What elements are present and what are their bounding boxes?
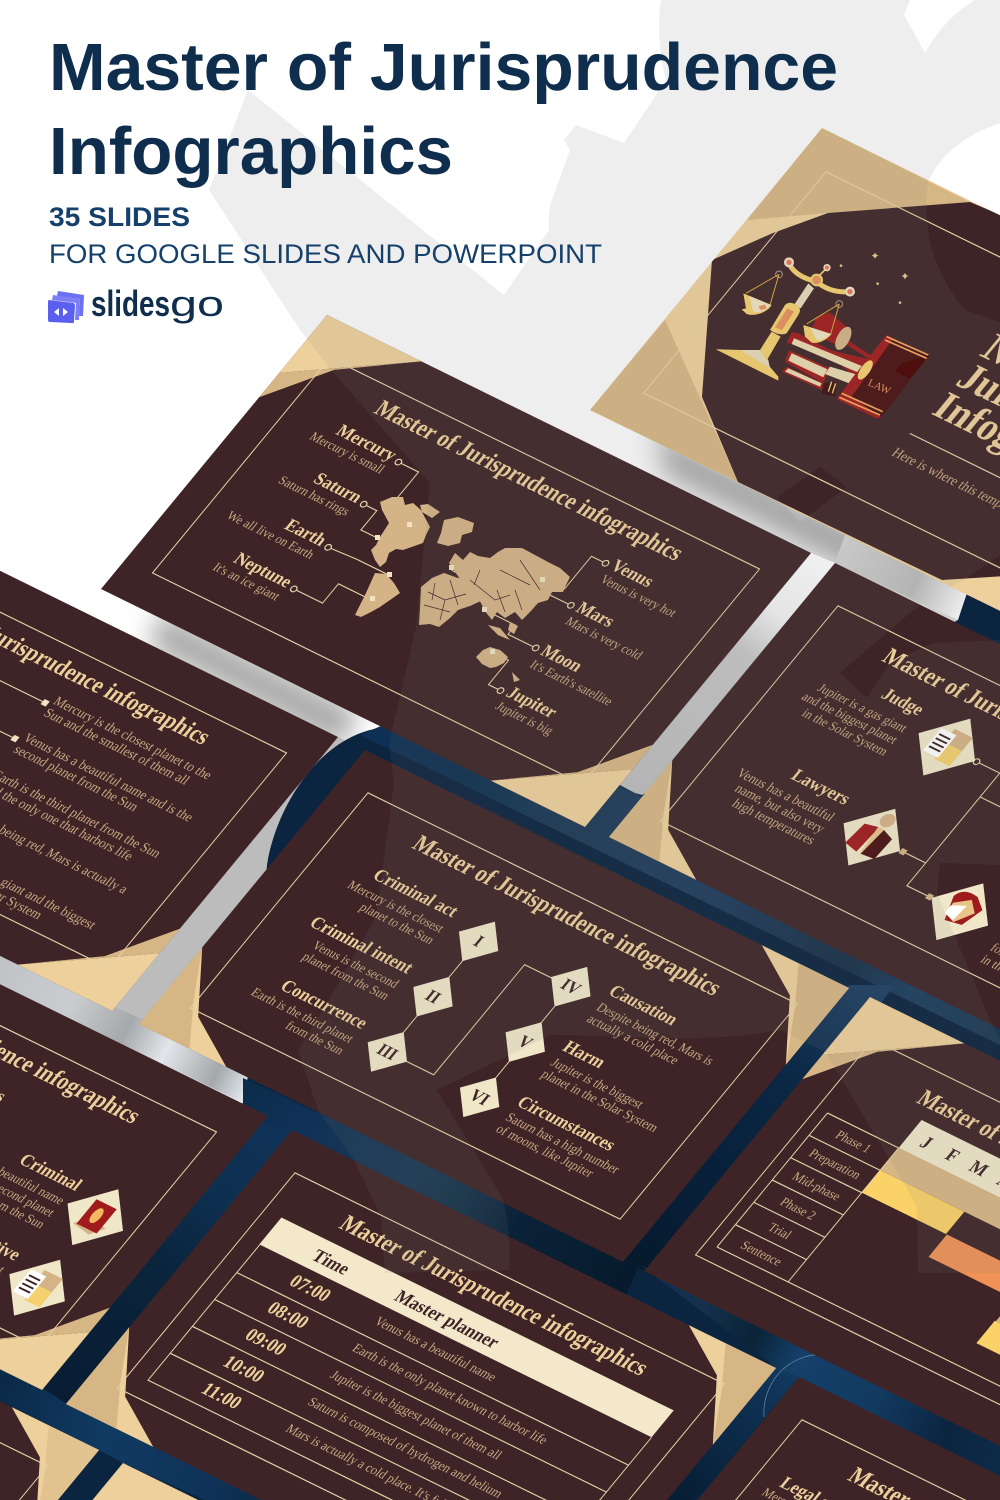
gantt header months	[899, 1120, 1000, 1309]
row 09:00	[240, 1325, 507, 1466]
centre slide title: Master of Jurisprudence infographics	[407, 831, 727, 1001]
table header band	[259, 1218, 674, 1437]
cover dark beige left wedge	[590, 320, 738, 482]
navy band under centre slide	[243, 1078, 640, 1305]
table header band: Time	[308, 1246, 355, 1279]
slide background	[0, 878, 268, 1390]
icon: slidesgo logo	[48, 291, 84, 323]
label: Mercury: Mercury	[332, 420, 402, 464]
frame	[661, 606, 1000, 1032]
beige corner left dark	[139, 947, 253, 1049]
logo wordmark: slides	[91, 283, 170, 324]
row 07:00	[285, 1271, 501, 1388]
diamond III: III	[373, 1040, 402, 1064]
beige corner top lower band	[259, 315, 421, 444]
text: Judge: in the Solar System	[799, 706, 891, 758]
light strip under left slide	[0, 945, 248, 1103]
label: Neptune: Neptune	[230, 548, 297, 591]
diamond IV	[535, 957, 607, 1016]
row 11:00	[196, 1379, 533, 1500]
beige corner left	[139, 947, 289, 1067]
navy band under gantt slide	[640, 1265, 1000, 1500]
navy band right of table slide	[655, 1367, 799, 1500]
cover beige background	[590, 128, 1000, 655]
icon: open book	[908, 869, 1000, 954]
row 10:00	[218, 1352, 508, 1500]
beige corner top	[55, 1463, 217, 1500]
drop shadows behind slides	[150, 430, 1000, 748]
frame	[696, 1040, 1000, 1466]
connectors	[293, 461, 606, 691]
label: Saturn: Saturn has rings	[275, 473, 353, 518]
text: Judge: Jupiter is a gas giant	[814, 681, 911, 735]
gantt bars	[806, 1148, 1000, 1421]
list text: Mercury: Mercury is the closest planet to the	[50, 694, 216, 782]
label: Mercury	[307, 413, 410, 481]
icon: document	[895, 705, 998, 789]
label: Venus: Venus is very hot	[597, 572, 680, 620]
navy background block	[0, 593, 1000, 1500]
right pan	[807, 304, 839, 334]
beige corner left dark	[609, 760, 723, 862]
world map	[355, 497, 570, 682]
beige corner left	[609, 760, 759, 880]
text: Criminal intent: planet from the Sun	[299, 950, 393, 1003]
icon: document diamond	[0, 1246, 88, 1329]
text: Circumstances: Circumstances	[513, 1092, 621, 1155]
icon: book diamond	[45, 1176, 146, 1259]
map markers	[370, 522, 545, 654]
frame	[0, 1255, 48, 1500]
label: Neptune: It's an ice giant	[210, 560, 283, 603]
beige corner top	[279, 315, 421, 419]
diamond VI	[444, 1068, 516, 1127]
label: Jupiter	[484, 678, 571, 738]
gantt row labels: Phase 1	[832, 1128, 874, 1156]
slide: planets text list	[0, 499, 338, 1011]
text: Criminal act	[335, 859, 464, 947]
text: Criminal	[0, 1119, 87, 1233]
frame	[118, 1173, 725, 1500]
row 08:00: Earth is the only planet known to harbor life	[349, 1340, 552, 1447]
label: Earth	[224, 492, 340, 566]
beige corner bottom band	[491, 698, 653, 827]
table header band: Master planner	[390, 1286, 504, 1352]
statue silhouette overlay on slides	[298, 128, 1000, 1273]
navy band left of table slide	[42, 1116, 292, 1404]
main title	[49, 30, 838, 189]
text: Lawyers: name, but also very	[732, 781, 829, 836]
navy band right of centre slide	[622, 985, 895, 1280]
frame	[625, 1420, 1000, 1500]
gantt row labels: Preparation	[806, 1146, 865, 1182]
beige corner top band	[802, 997, 964, 1126]
text: Circumstances: Saturn has a high number	[502, 1110, 624, 1177]
gantt row labels: Mid-phase	[789, 1169, 844, 1203]
stars	[872, 253, 879, 259]
beige corner bottom	[18, 907, 160, 1011]
text: Lawyers: Venus has a beautiful	[734, 765, 838, 824]
beige corner right	[0, 1407, 99, 1500]
gavel	[843, 340, 870, 357]
slide: legal elements diamonds	[139, 750, 849, 1262]
table grid	[148, 1245, 652, 1500]
label: Jupiter: Jupiter is big	[492, 699, 557, 738]
beige corner left	[66, 1327, 216, 1447]
text: Concurrence: Earth is the third planet	[248, 985, 357, 1046]
beige corner right dark	[0, 1425, 99, 1500]
text: Causation	[583, 981, 733, 1080]
roles slide background	[609, 563, 1000, 1075]
cover dark beige top wedge	[747, 128, 970, 220]
row 10:00: 10:00	[218, 1352, 269, 1387]
label: Neptune	[210, 543, 306, 607]
diamond V	[489, 1013, 561, 1071]
frame	[0, 542, 287, 968]
row 09:00: Jupiter is the biggest planet of them all	[327, 1367, 506, 1462]
list text: Venus: second planet from the Sun	[11, 742, 142, 814]
text: Judge	[789, 657, 929, 759]
list text: Mercury: Sun and the smallest of them all	[41, 705, 193, 788]
text: Criminal intent: Criminal intent	[306, 912, 418, 977]
diamond I: I	[469, 932, 488, 951]
connector dots	[879, 758, 1000, 901]
gantt row labels	[732, 1124, 883, 1271]
label: Mars: Mars is very cold	[562, 614, 646, 663]
law books stack	[787, 332, 872, 383]
slide: criminal and executive	[0, 878, 268, 1390]
text: Lawyers: high temperatures	[729, 796, 819, 847]
text: Harm: Jupiter is the biggest	[548, 1055, 648, 1111]
gantt slide background	[644, 997, 1000, 1500]
gantt header months: J	[916, 1132, 937, 1153]
diamond III	[351, 1023, 423, 1081]
text: Judge: and the biggest planet	[799, 690, 901, 747]
main title: Infographics	[49, 114, 453, 189]
connector lines	[0, 652, 45, 739]
row 07:00: 07:00	[285, 1271, 335, 1306]
label: Jupiter: Jupiter	[502, 682, 562, 722]
slide background	[0, 1212, 99, 1500]
label: Moon: It's Earth's satellite	[527, 658, 616, 708]
label: Mercury: Mercury is small	[307, 429, 388, 476]
slide: cover with scales and books	[590, 128, 1000, 655]
beige corner right	[626, 1325, 776, 1445]
row 09:00: 09:00	[240, 1325, 291, 1360]
frame	[191, 793, 798, 1219]
text: Criminal intent: Venus is the second	[309, 938, 402, 991]
diamond II: II	[421, 986, 445, 1007]
text: Concurrence: from the Sun	[282, 1019, 348, 1058]
text: Causation: Causation	[605, 981, 683, 1029]
connector lines	[884, 762, 1000, 899]
gantt header months: M	[965, 1157, 993, 1180]
beige corner bottom	[491, 723, 633, 827]
text: Legal system	[759, 1469, 904, 1500]
list slide background	[0, 499, 338, 1011]
diamond IV: IV	[557, 975, 586, 999]
text: Executive	[0, 1204, 25, 1278]
gantt row labels: Trial	[765, 1220, 795, 1242]
text: Criminal: Criminal	[15, 1149, 87, 1194]
centre slide background	[139, 750, 849, 1262]
frame	[0, 921, 217, 1347]
label: Saturn	[275, 456, 375, 523]
text: Circumstances: of moons, like Jupiter	[493, 1121, 598, 1180]
map slide background	[101, 315, 811, 827]
diamond V: V	[514, 1032, 537, 1053]
label: Moon: Moon	[536, 641, 587, 676]
slide: bottom corner	[0, 1463, 607, 1500]
navy band above centre slide	[360, 722, 1000, 1045]
row 08:00	[262, 1298, 553, 1451]
grey strip between map slide and judge slide	[612, 553, 835, 800]
gantt grid	[717, 1113, 1000, 1443]
table slide background	[66, 1130, 776, 1500]
beige corner top	[822, 997, 964, 1101]
beige corner bottom band	[18, 882, 180, 1011]
table slide title: Master of Jurisprudence infographics	[334, 1211, 654, 1381]
slide: lower left	[0, 1212, 99, 1500]
big law book	[837, 335, 929, 417]
beige corner right dark	[662, 1343, 776, 1445]
slide background	[573, 1377, 1000, 1500]
grey strip above judge slide	[835, 535, 967, 620]
slide: roles with icons	[609, 563, 1000, 1075]
diamond I	[443, 912, 515, 971]
grey strip left of centre slide	[112, 737, 365, 1030]
cover maroon area	[702, 202, 1000, 580]
cover underline	[910, 433, 1000, 534]
label: Moon	[518, 636, 630, 708]
frame	[153, 358, 760, 784]
text: Criminal intent	[285, 912, 418, 1003]
text: Judge: Judge	[877, 684, 929, 719]
text: Circumstances	[492, 1092, 638, 1188]
beige corner right	[699, 945, 849, 1065]
icon: lawyer	[820, 795, 923, 879]
label: Mars	[554, 593, 660, 663]
gantt header months: F	[941, 1145, 964, 1166]
gantt row labels: Sentence	[737, 1238, 785, 1269]
row 11:00: 11:00	[196, 1379, 246, 1414]
background statue silhouette	[209, 0, 1000, 1273]
label: Saturn: Saturn	[309, 468, 367, 507]
icon: scales of justice and law books	[716, 253, 929, 418]
row 07:00: Venus has a beautiful name	[371, 1313, 500, 1384]
text: Causation: Despite being red, Mars is	[593, 999, 718, 1068]
text: Harm: planet in the Solar System	[538, 1066, 663, 1135]
logo wordmark: go	[170, 283, 224, 324]
gantt row labels: Phase 2	[777, 1195, 819, 1223]
icon: scales of justice and law books: LAW	[866, 378, 893, 398]
map slide title: Master of Jurisprudence infographics	[369, 396, 689, 566]
row 08:00: 08:00	[262, 1298, 313, 1333]
text: Lawyers: Lawyers	[787, 765, 855, 808]
slide: schedule table	[66, 1130, 776, 1500]
text: Concurrence	[238, 967, 372, 1058]
label: Venus	[588, 551, 694, 620]
text: Causation: actually a cold place	[584, 1011, 683, 1067]
bullet markers	[10, 699, 50, 743]
diamond II	[397, 967, 469, 1026]
row 10:00: Saturn is composed of hydrogen and helium	[305, 1394, 507, 1500]
slide: gantt chart	[644, 997, 1000, 1500]
navy band under left lower slide	[0, 1360, 300, 1500]
connector lines	[387, 941, 571, 1097]
text: Harm: Harm	[559, 1037, 610, 1072]
label: Venus: Venus	[607, 555, 659, 591]
beige corner bottom	[0, 1286, 90, 1390]
slide: world map	[101, 315, 811, 827]
label: Earth: Earth	[281, 515, 331, 550]
beige corner left dark	[66, 1327, 180, 1429]
slide: legal system	[573, 1377, 1000, 1500]
text: Criminal act: Criminal act	[369, 865, 463, 921]
text: Concurrence: Concurrence	[276, 976, 372, 1033]
text: Criminal act: planet to the Sun	[356, 900, 438, 947]
thin arc detail on navy	[764, 1354, 825, 1417]
diamond VI: VI	[465, 1086, 494, 1109]
text: Criminal act: Mercury is the closest	[344, 878, 447, 936]
beige corner bottom band	[0, 1261, 110, 1390]
label: Mars: Mars	[572, 598, 620, 631]
text: Lawyers	[714, 745, 855, 848]
label: Earth: We all live on Earth	[224, 508, 318, 562]
cover frame	[644, 172, 1000, 610]
beige corner right dark	[735, 963, 849, 1065]
subtitle: slide count: 35 SLIDES	[49, 202, 190, 232]
subtitle: platforms: FOR GOOGLE SLIDES AND POWERPOINT	[49, 239, 602, 269]
text: Harm	[538, 1037, 687, 1135]
main title: Master of Jurisprudence	[49, 30, 838, 105]
list text: Venus: Venus has a beautiful name and is the	[20, 730, 197, 824]
slide background	[0, 1463, 607, 1500]
